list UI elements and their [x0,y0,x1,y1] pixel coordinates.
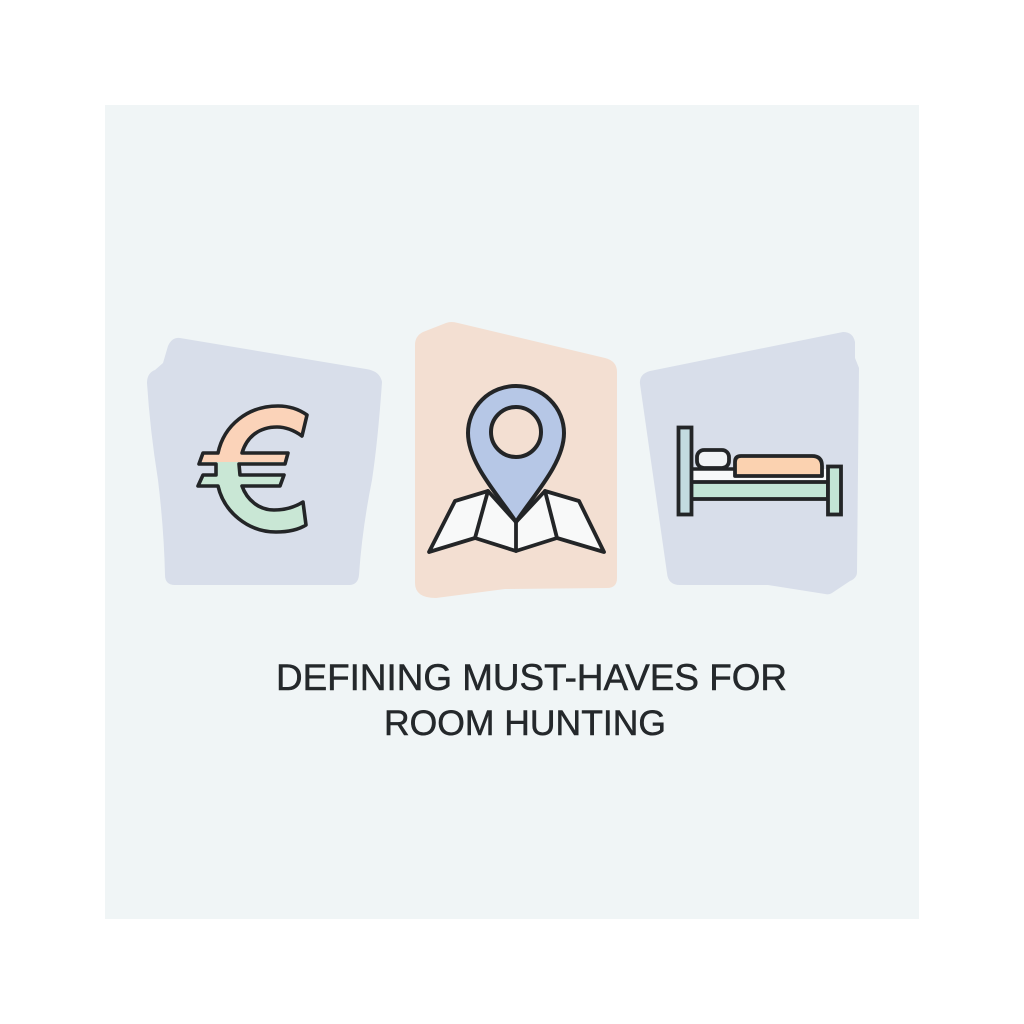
location card background [415,322,617,598]
panel: location card [415,322,617,598]
title line 2: ROOM HUNTING [384,704,666,743]
under-pillow line [692,467,735,471]
pillow [697,450,729,468]
title [276,657,787,743]
budget card background [147,338,382,585]
blanket [735,456,822,476]
icon: euro symbol [198,406,307,532]
title line 1: DEFINING MUST-HAVES FOR [276,657,787,698]
room card background [640,332,859,594]
background panel [105,105,919,919]
mattress [692,469,828,482]
panel: budget card [147,338,382,585]
bed rail [691,482,828,499]
panel: room card [640,332,859,594]
infographic canvas [105,105,919,919]
headboard [678,428,692,514]
icon: folded map [429,491,604,552]
icon: location pin [468,386,564,522]
icon: bed [678,428,841,514]
footboard [828,466,841,514]
